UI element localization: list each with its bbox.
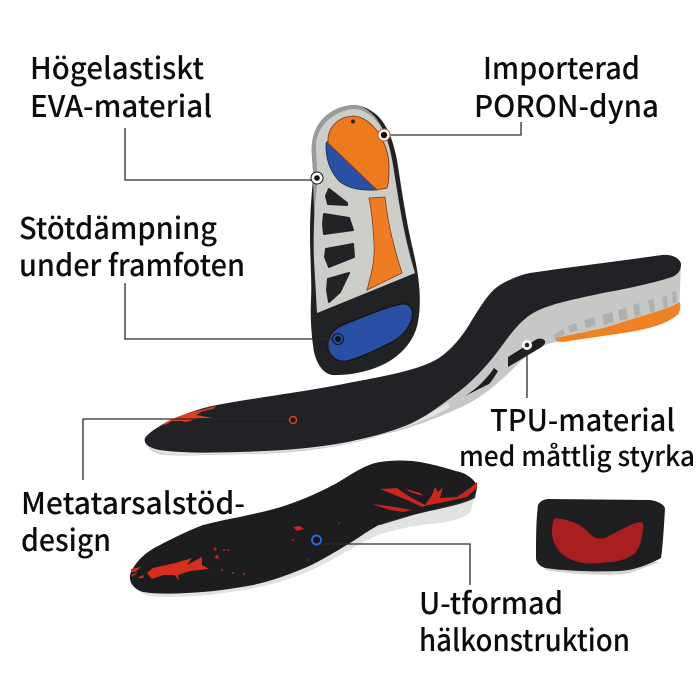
black top surface [145,255,681,453]
label: imported PORON [474,44,659,126]
marker: U-heel [312,536,321,544]
grey ticks [553,291,677,339]
marker: forefoot [332,334,344,344]
white underside [130,480,477,597]
marker: EVA [311,172,323,184]
sole outer body [310,105,420,375]
black upper [130,460,477,594]
orange poron pad [328,116,389,190]
label: TPU material: TPU-material [490,396,675,440]
black cup [536,499,665,571]
label: imported PORON: Importerad [483,44,640,88]
label: TPU material: med måttlig styrka [459,435,695,474]
label: U-shaped heel: U-tformad [419,579,563,623]
TPU window small [465,368,498,396]
callout leader lines [83,122,527,585]
marker: TPU [522,340,532,350]
label: metatarsal support [21,479,245,560]
blue forefoot wedge [326,141,377,190]
label: imported PORON: PORON-dyna [474,82,659,126]
grey EVA side wall [145,262,681,455]
blue heel pad [328,304,413,361]
red U cutout [552,518,643,563]
red splash [163,406,216,425]
label: high elastic EVA: EVA-material [30,82,212,126]
label: TPU material [459,396,695,474]
insole: top-down sole view [310,105,420,375]
insole: side profile view [145,255,681,455]
marker: PORON [378,129,390,141]
TPU window large [508,339,545,367]
label: high elastic EVA [30,44,212,126]
heel cup [536,499,665,575]
lighter underside edge [145,403,450,455]
red specks [214,522,340,575]
small hole [351,120,355,124]
label: metatarsal support: Metatarsalstöd- [21,479,245,523]
label: forefoot cushioning: under framfoten [19,241,245,285]
label: forefoot cushioning [19,204,245,285]
label: U-shaped heel [419,579,630,660]
label: metatarsal support: design [21,516,111,560]
red heel splash [380,482,477,507]
label: high elastic EVA: Högelastiskt [30,44,204,88]
insole: three-quarter top view [130,460,477,597]
marker: metatarsal [290,416,296,424]
white base [538,560,660,575]
label: forefoot cushioning: Stötdämpning [19,204,217,248]
label: U-shaped heel: hälkonstruktion [419,616,630,660]
dark edge [370,480,477,525]
orange heel wedge [555,302,680,342]
light panel [314,109,415,313]
grey rim [312,105,415,313]
orange arch strip [367,197,402,290]
red toe splash [147,557,209,581]
TPU pads [323,189,354,302]
